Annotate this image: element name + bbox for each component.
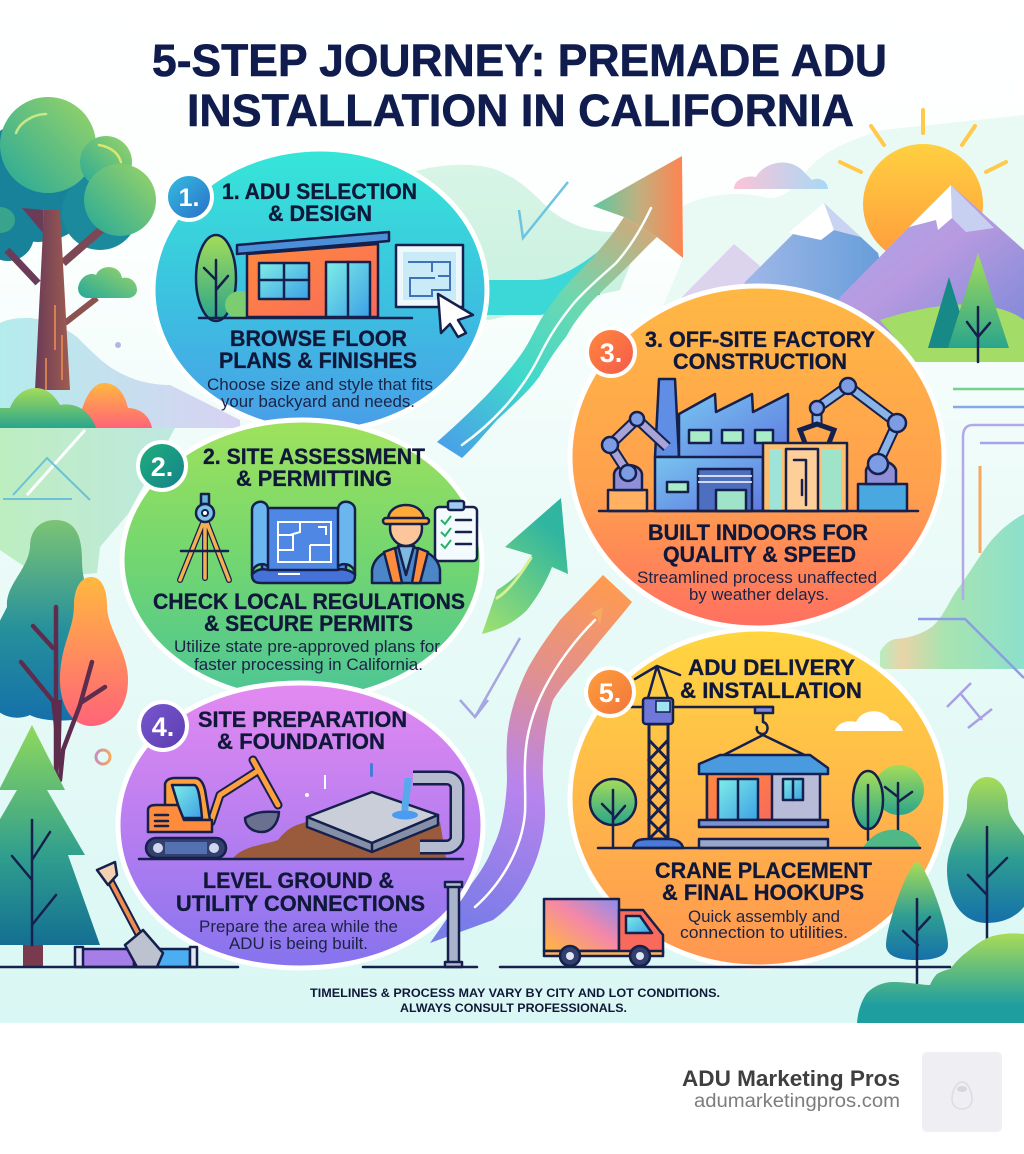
badge 2 [138,442,186,490]
landscape: pale swooshes [0,115,1024,575]
badge 5 [586,668,634,716]
title: 5-STEP JOURNEY: PREMADE ADU [152,35,887,86]
description [637,569,877,604]
title [152,35,887,136]
icon: trees in step 5 [590,765,924,848]
heading [198,707,407,754]
icon: utility post [445,882,462,967]
circle [122,420,482,700]
circle [118,683,483,968]
heading: 2. SITE ASSESSMENT [203,444,426,469]
icon: cloud [835,711,903,731]
step badges [138,174,635,750]
heading [680,655,862,703]
heading: CONSTRUCTION [673,349,847,374]
subheading: PLANS & FINISHES [219,348,417,373]
description [207,376,433,411]
pine trees right [928,253,1009,362]
heading: & DESIGN [268,201,372,226]
icon: blueprint [252,502,355,583]
arrow: step 2 to step 3 [482,498,568,634]
icon: foundation slab with pipe [233,763,457,858]
subheading [153,589,465,636]
description: your backyard and needs. [221,393,415,411]
panel: step 1 [153,149,487,431]
description: ADU is being built. [229,935,368,953]
subheading [219,326,417,373]
subheading: LEVEL GROUND & [203,868,394,893]
panel: step 2 [122,420,482,700]
description: faster processing in California. [194,656,423,674]
arrow: step 1 to step 3 [437,156,683,458]
heading [222,179,417,226]
subheading: CHECK LOCAL REGULATIONS [153,589,465,614]
subheading [648,520,868,567]
description [199,918,398,953]
icon: ADU module on crane [699,735,828,848]
heading [203,444,426,491]
panel: step 3 [570,286,944,628]
heading [645,327,875,374]
big tree top-left [0,97,156,390]
subheading: CRANE PLACEMENT [655,858,873,883]
icon: sun [840,110,1006,264]
right decorations [460,389,1024,728]
subheading: & SECURE PERMITS [204,611,413,636]
icon: excavator [146,760,279,858]
icon: inspector and checklist [372,501,477,583]
badge 4 [139,702,187,750]
icon: pink cloud [734,163,828,189]
heading: & PERMITTING [236,466,392,491]
description: Utilize state pre-approved plans for [174,638,441,656]
subheading: & FINAL HOOKUPS [662,880,864,905]
description: Streamlined process unaffected [637,569,877,587]
panel: step 5 [570,629,946,967]
description: Prepare the area while the [199,918,398,936]
heading: ADU DELIVERY [688,655,855,680]
subheading [655,858,873,905]
footer panel [0,1023,1024,1154]
circle [570,629,946,967]
subheading [176,868,425,916]
ground lines [0,966,950,968]
evergreen tree bottom-left [0,725,100,967]
icon: tower crane [630,666,773,848]
disclaimer: ALWAYS CONSULT PROFESSIONALS. [400,1001,627,1015]
check-mark line decoration [519,182,568,238]
description: connection to utilities. [680,924,848,942]
subheading: BROWSE FLOOR [230,326,407,351]
subheading: QUALITY & SPEED [663,542,856,567]
icon: delivery truck [544,899,663,966]
badge 1 [166,174,212,220]
footer logo [922,1052,1002,1132]
heading: SITE PREPARATION [198,707,407,732]
badge 3: 3. [600,338,622,368]
footer brand text [682,1066,900,1112]
description: Choose size and style that fits [207,376,433,394]
icon: pipe and shovel [75,862,197,967]
description [174,638,441,674]
bushes left [0,383,152,428]
icon: floor plan with cursor [396,245,473,337]
description [680,908,848,942]
heading: 3. OFF-SITE FACTORY [645,327,875,352]
disclaimer [310,986,720,1015]
badge 5: 5. [599,678,621,708]
mid-left trees [0,520,128,785]
badge 3 [587,328,635,376]
description: Quick assembly and [688,908,840,926]
description: by weather delays. [689,586,829,604]
icon: surveying tripod [180,494,229,580]
heading: 1. ADU SELECTION [222,179,417,204]
panel: step 4 [118,683,483,968]
mountains [682,185,1024,362]
triangle outline decoration [3,430,90,500]
arrow: step 4 to step 5 [430,575,632,943]
icon: factory with robot arms [599,378,918,511]
footer brand text: ADU Marketing Pros [682,1066,900,1091]
subheading: UTILITY CONNECTIONS [176,891,425,916]
footer brand text: adumarketingpros.com [694,1091,900,1112]
circle [570,286,944,628]
circle [153,149,487,431]
heading: & INSTALLATION [680,678,862,703]
badge 4: 4. [152,712,174,742]
heading: & FOUNDATION [217,729,385,754]
badge 2: 2. [151,452,173,482]
small ring decoration [96,750,110,764]
icon: ADU house [196,232,412,321]
disclaimer: TIMELINES & PROCESS MAY VARY BY CITY AND LOT CONDITIONS. [310,986,720,1000]
subheading: BUILT INDOORS FOR [648,520,868,545]
trees bottom-right [857,777,1024,1023]
title: INSTALLATION IN CALIFORNIA [187,85,854,136]
badge 1: 1. [179,184,199,212]
ground line [139,858,463,860]
